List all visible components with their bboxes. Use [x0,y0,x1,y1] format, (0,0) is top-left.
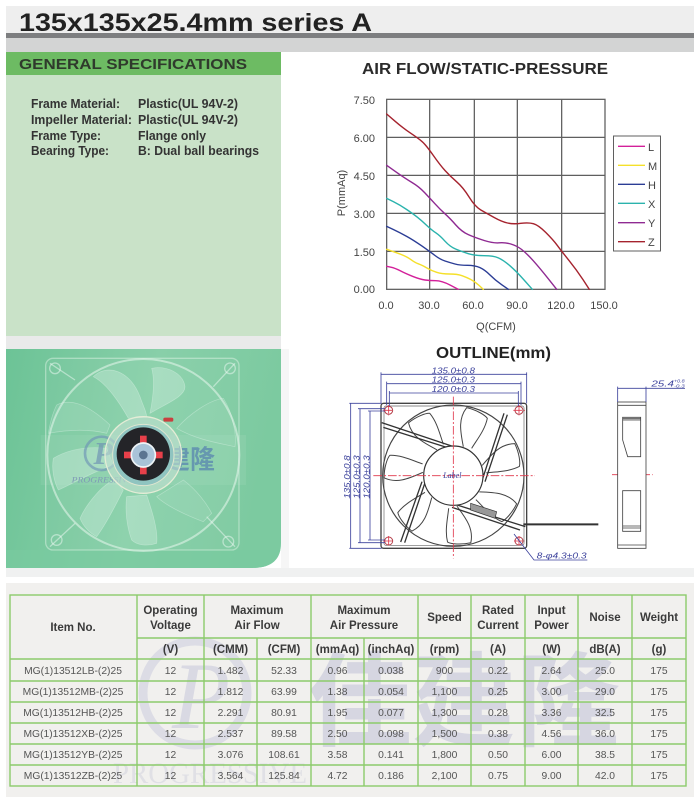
table row H: MG(1)13512HB-(2)25 [23,708,123,719]
fan side view [618,402,646,548]
table row Y: 3.076 [218,750,244,761]
table row M: 63.99 [271,687,297,698]
outline technical drawing [342,365,685,561]
x axis labels: 150.0 [590,300,618,312]
table row Y: 6.00 [541,750,562,761]
cable [523,521,598,527]
table header: (CMM) [213,644,248,656]
table row Y: 0.141 [378,750,404,761]
y axis title: P(mmAq) [336,170,348,216]
table row M: 1.38 [327,687,348,698]
heading: air flow chart: AIR FLOW/STATIC-PRESSURE [362,61,608,78]
table row M: 1,100 [432,687,458,698]
table row Z: 3.564 [218,771,244,782]
table row Z: 0.75 [488,771,508,782]
table row H: 1.95 [327,708,348,719]
table row X: 2.537 [218,729,244,740]
table header: Input [537,605,566,617]
table row M: 0.25 [488,687,508,698]
title banner [6,6,694,52]
table row L: 52.33 [271,666,297,677]
table row M [23,687,668,698]
specification list: Impeller Material: [31,113,132,127]
dimension labels: 120.0±0.3 [361,455,371,499]
table header: Power [534,620,569,632]
dimension labels: 120.0±0.3 [432,384,475,394]
table row Z: 0.186 [378,771,404,782]
table header: Noise [589,612,621,624]
table row Z: 2,100 [432,771,458,782]
table header: Air Pressure [330,620,398,632]
table grid [10,595,686,786]
y axis labels: 6.00 [354,133,375,145]
watermark logo: PROGRESSIVE [71,476,133,485]
table row M: 1.812 [218,687,244,698]
centre lines [373,397,653,558]
table row L: 12 [165,666,176,677]
specification list: Bearing Type: [31,144,109,158]
x axis title: Q(CFM) [476,321,516,333]
dimension labels [342,365,685,561]
table row M: 29.0 [595,687,615,698]
table row M: 0.054 [378,687,404,698]
fan photograph illustration [41,358,246,551]
curve H [387,226,508,289]
table row Y: 175 [650,750,668,761]
dimension labels: -0.3 [674,383,685,388]
curve Z [387,114,589,289]
table header: Air Flow [234,620,280,632]
dimension labels: 135.0±0.8 [342,455,352,499]
table row H: 0.077 [378,708,404,719]
table watermark [113,641,620,790]
table row M: 175 [650,687,668,698]
table header: Speed [427,612,462,624]
panel: general specifications [6,52,281,349]
table row X: 175 [650,729,668,740]
table row H: 1,300 [432,708,458,719]
curve Y [387,165,557,289]
table row L [24,666,668,677]
table header: Weight [640,612,678,624]
y axis labels: 3.00 [354,209,375,221]
table watermark: P [171,643,230,749]
x axis labels: 60.0 [462,300,484,312]
label text: Label [442,471,462,480]
table row H: 12 [165,708,176,719]
table row X: 89.58 [271,729,297,740]
table row Z: 4.72 [327,771,348,782]
table row Y: 38.5 [595,750,615,761]
table header: (A) [490,644,506,656]
table row M: 12 [165,687,176,698]
x axis labels: 0.0 [378,300,394,312]
x axis labels: 120.0 [547,300,575,312]
curve X [387,198,532,289]
table row H: 32.5 [595,708,615,719]
table row L: MG(1)13512LB-(2)25 [24,666,122,677]
table header: (CFM) [268,644,300,656]
table header: (V) [163,644,178,656]
table header: (rpm) [430,644,459,656]
y axis labels: 1.50 [354,247,375,259]
table row L: 25.0 [595,666,615,677]
fan front view [379,403,598,552]
table row Y: 0.50 [488,750,508,761]
title: 135x135x25.4mm series A [19,9,372,37]
watermark logo: P [92,436,113,471]
y axis labels: 0.00 [354,284,375,296]
specification list: Frame Type: [31,129,101,143]
table row Z: 125.84 [268,771,300,782]
table row M: 3.00 [541,687,562,698]
table header: Rated [482,605,514,617]
table row L: 175 [650,666,668,677]
table header: (W) [542,644,561,656]
specification list: Frame Material: [31,97,120,111]
curve M [387,249,483,289]
table watermark: 佳建隆 [308,646,620,760]
y axis labels: 4.50 [354,171,375,183]
table row Y: 3.58 [327,750,348,761]
chart legend: M [648,161,657,173]
table header: dB(A) [589,644,621,656]
x axis labels: 30.0 [418,300,440,312]
chart legend: L [648,142,654,154]
table row Z: 12 [165,771,176,782]
watermark logo [71,436,215,485]
dimension labels: 125.0±0.3 [432,375,475,385]
table row L: 1.482 [218,666,244,677]
curve L [387,266,458,289]
table row H: 80.91 [271,708,297,719]
table row X: 0.098 [378,729,404,740]
table row X: MG(1)13512XB-(2)25 [23,729,123,740]
specification list: Flange only [138,129,206,143]
specification list: B: Dual ball bearings [138,144,259,158]
table row Z: 175 [650,771,668,782]
heading: general specifications: GENERAL SPECIFICATIONS [19,56,247,73]
panel: fan photo [6,349,282,568]
table row L: 0.22 [488,666,508,677]
table row X: 36.0 [595,729,615,740]
line chart: air flow vs static pressure [336,95,660,333]
table row H: 3.36 [541,708,562,719]
chart legend: Y [648,218,656,230]
y axis labels: 7.50 [354,95,375,107]
table header: Voltage [150,620,191,632]
dimension labels: 25.4 [650,378,674,388]
specification list: Plastic(UL 94V-2) [138,97,238,111]
table row X [23,729,668,740]
table row X: 4.56 [541,729,562,740]
table row L: 0.038 [378,666,404,677]
table row M: MG(1)13512MB-(2)25 [23,687,124,698]
table header: Current [477,620,519,632]
table row Y: MG(1)13512YB-(2)25 [23,750,123,761]
specification list: Plastic(UL 94V-2) [138,113,238,127]
table header: (mmAq) [316,644,359,656]
table header: Maximum [230,605,284,617]
table row L: 2.64 [541,666,562,677]
table row L: 900 [436,666,453,677]
table header: (g) [652,644,667,656]
table header [50,605,678,656]
table row Z: 9.00 [541,771,562,782]
table row X: 12 [165,729,176,740]
table row H: 175 [650,708,668,719]
table row H: 0.28 [488,708,508,719]
dimension labels: 8-φ4.3±0.3 [537,551,587,561]
table row Y: 12 [165,750,176,761]
dimension lines [349,372,685,560]
table row H [23,708,668,719]
table row Z [24,771,668,782]
x axis labels [378,300,618,333]
table row Y: 108.61 [268,750,300,761]
table row Y [23,750,668,761]
y axis labels [354,95,375,296]
table row Y: 1,800 [432,750,458,761]
dimension labels: 135.0±0.8 [432,365,475,375]
table row Z: 42.0 [595,771,615,782]
chart legend: X [648,199,656,211]
table header: Maximum [337,605,391,617]
table row X: 0.38 [488,729,508,740]
dimension labels: +0.8 [674,379,685,384]
specification list [31,97,259,158]
dimension labels: 125.0±0.3 [351,455,361,499]
table row H: 2.291 [218,708,244,719]
mounting holes [385,406,523,545]
x axis labels: 90.0 [506,300,528,312]
chart legend: Z [648,237,655,249]
table row X: 1,500 [432,729,458,740]
table header: (inchAq) [368,644,414,656]
chart legend: H [648,180,656,192]
watermark logo: 建隆 [165,444,215,474]
table row L: 0.96 [327,666,348,677]
heading: outline: OUTLINE(mm) [436,345,551,362]
decorative bands [281,349,289,568]
fan hub [105,417,182,493]
table header: Item No. [50,622,96,634]
table header: Operating [143,605,198,617]
table row Z: MG(1)13512ZB-(2)25 [24,771,122,782]
panel: specification table [6,583,694,797]
chart legend [614,136,660,251]
table watermark: PROGRESSIVE [113,757,307,790]
table row X: 2.50 [327,729,348,740]
